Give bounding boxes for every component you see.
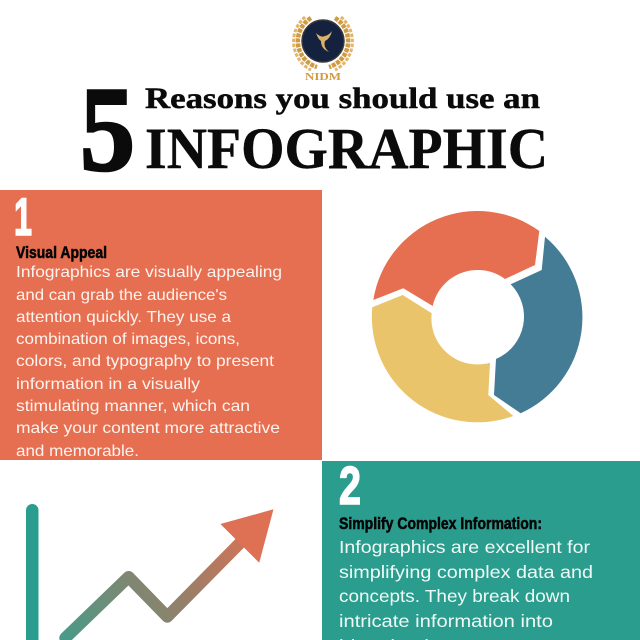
segment: blue [494,237,582,413]
segment: yellow [372,295,513,422]
body text: stimulating manner, which can [16,398,250,415]
body text: and memorable. [16,443,139,460]
body text: make your content more attractive [16,420,280,437]
chart: rising arrow [26,504,274,640]
title: INFOGRAPHIC [145,116,548,181]
body text [339,537,593,640]
body text: colors, and typography to present [16,353,275,370]
heading: visual appeal: Visual Appeal [16,243,107,262]
logo: NIDM emblem: NIDM [305,71,342,83]
axis [26,504,38,640]
body text [16,264,282,460]
body text: Infographics are visually appealing [16,264,282,281]
panel: reason 1 [0,188,322,460]
heading: simplify complex information: Simplify Complex Information: [339,514,542,533]
title [80,63,548,197]
title: Reasons you should use an [145,83,540,115]
panel: reason 2 [322,456,640,640]
logo: NIDM emblem [294,17,352,83]
body text: attention quickly. They use a [16,309,231,326]
body text: simplifying complex data and [339,562,593,582]
number 1: 1 [14,188,32,247]
number 2: 2 [339,456,361,516]
body text: and can grab the audience's [16,287,227,304]
body text: concepts. They break down [339,586,570,606]
body text: combination of images, icons, [16,331,240,348]
chart: cycle donut [372,211,582,422]
body text: Infographics are excellent for [339,537,590,557]
body text: information in a visually [16,376,200,393]
trend line [65,543,240,638]
body text: intricate information into [339,611,553,631]
big numeral 5: 5 [80,63,135,197]
segment: red [373,211,539,306]
arrow head [220,509,274,563]
